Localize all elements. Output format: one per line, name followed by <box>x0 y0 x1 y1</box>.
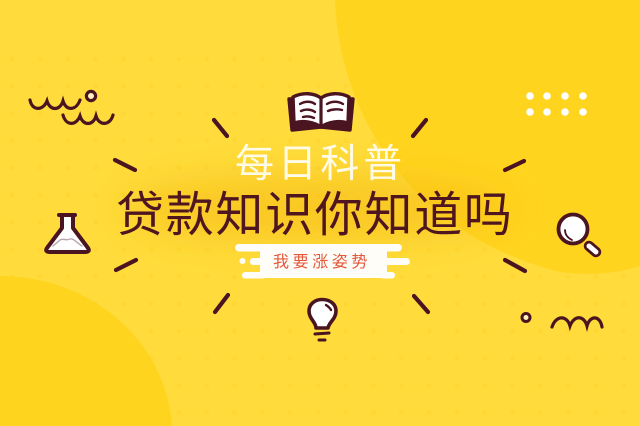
icon: flask <box>46 215 89 252</box>
sunburst rays <box>115 120 525 312</box>
icon: magnifier <box>558 214 596 252</box>
icon: white dots <box>526 92 587 116</box>
banner button <box>235 244 410 278</box>
background shape: bottom left <box>0 276 172 426</box>
background shape: top right <box>335 0 640 274</box>
banner label: 我要涨姿势 <box>273 253 371 271</box>
icon: waves bottom right <box>552 318 602 327</box>
main title: 贷款知识你知道吗 <box>116 189 514 242</box>
title glow <box>120 174 510 242</box>
icon: small circle <box>522 314 530 322</box>
icon: light bulb <box>309 300 336 340</box>
icon: waves top left <box>30 91 113 124</box>
subtitle: daily science: 每日科普 <box>235 143 406 186</box>
icon: book <box>289 94 353 130</box>
